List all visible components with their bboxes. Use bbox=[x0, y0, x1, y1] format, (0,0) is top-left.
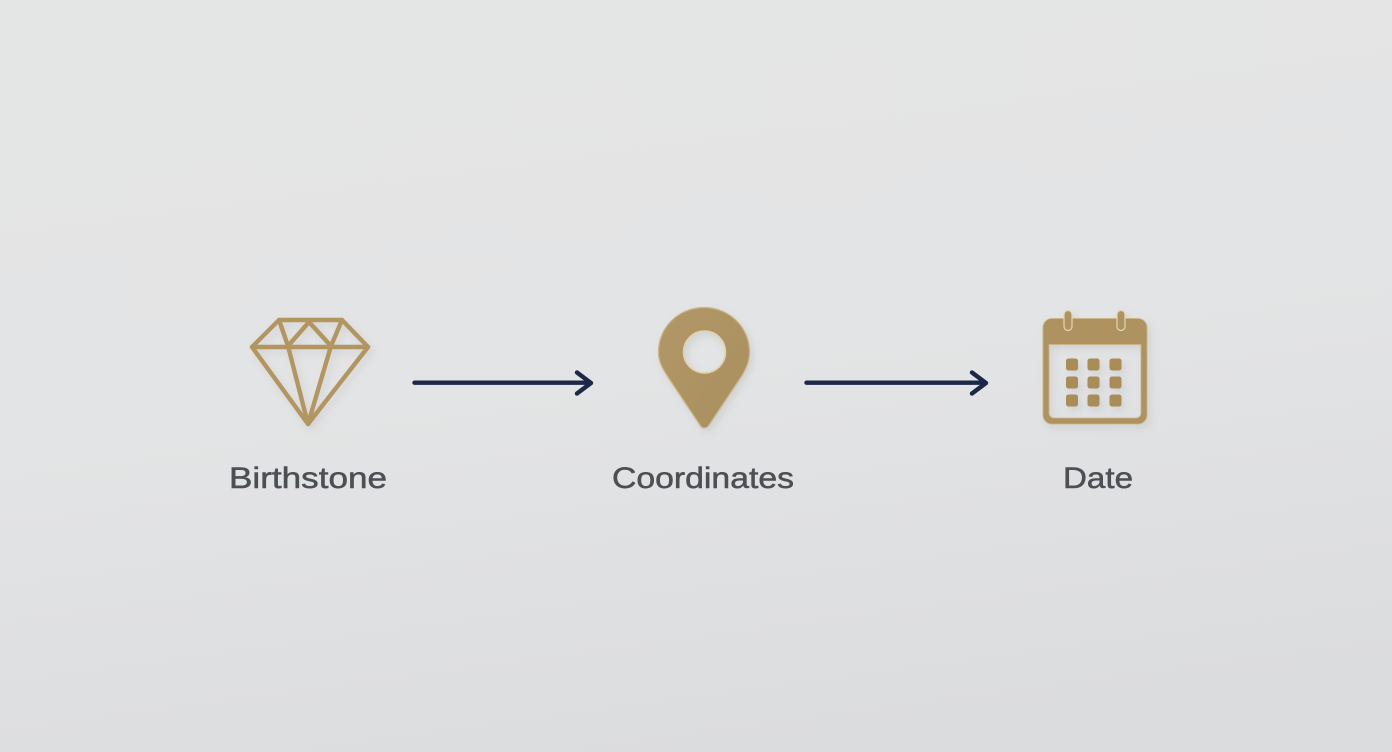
icon: map pin bbox=[658, 308, 750, 428]
label: Birthstone: Birthstone bbox=[229, 462, 387, 495]
label: Coordinates: Coordinates bbox=[612, 462, 794, 495]
icon: calendar bbox=[1043, 310, 1147, 424]
label: Date: Date bbox=[1063, 462, 1133, 495]
icon: diamond bbox=[252, 320, 368, 424]
arrow: birthstone to coordinates bbox=[414, 372, 591, 394]
arrow: coordinates to date bbox=[806, 372, 986, 394]
